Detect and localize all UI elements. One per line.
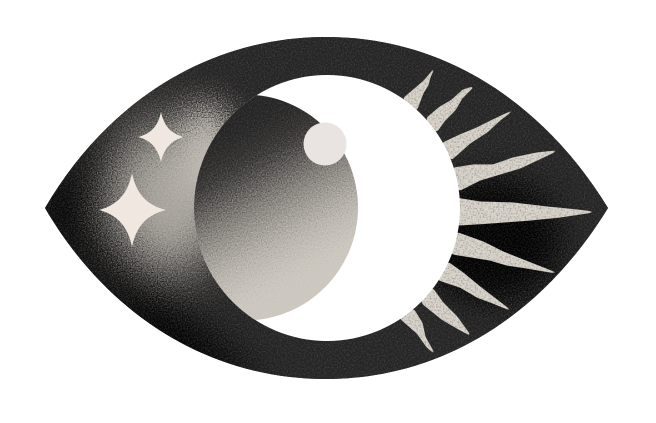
- illustration: eye with moon and sun: [45, 37, 608, 379]
- small sparkle star: [138, 112, 184, 162]
- eye shape with shaded grain: [45, 37, 608, 379]
- large sparkle star: [99, 173, 166, 247]
- white iris circle: [194, 75, 460, 341]
- moon highlight circle: [304, 122, 346, 166]
- crescent moon body: [194, 95, 358, 320]
- sun rays: [400, 69, 593, 353]
